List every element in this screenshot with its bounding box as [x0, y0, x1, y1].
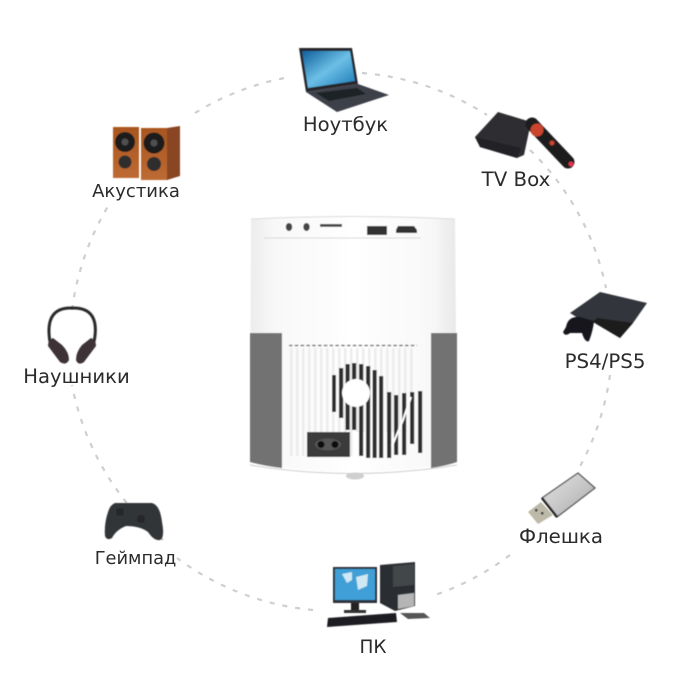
- right grey speaker panel: [431, 333, 457, 468]
- label: TV Box: TV Box: [481, 168, 551, 191]
- label: PC: ПК: [359, 637, 387, 658]
- label: flash drive: Флешка: [519, 525, 603, 548]
- device: speakers: [113, 126, 180, 180]
- device: desktop PC: [327, 562, 430, 627]
- dashed connection ring: [72, 73, 610, 610]
- label: speakers: Акустика: [92, 181, 180, 202]
- projector rear view: [250, 216, 457, 480]
- left grey speaker panel: [250, 333, 282, 468]
- device: gamepad: [105, 503, 163, 540]
- device: USB flash drive: [528, 473, 595, 524]
- top edge: [251, 216, 455, 219]
- bottom edge: [250, 465, 457, 474]
- power socket: [307, 432, 350, 457]
- projector body: [250, 216, 457, 472]
- vent light slats: [290, 348, 412, 456]
- port divider: [264, 238, 421, 239]
- label: headphones: Наушники: [23, 365, 130, 388]
- audio jack 1: [286, 223, 292, 231]
- vent top dashes: [289, 344, 417, 346]
- fan hub highlight: [342, 379, 370, 407]
- label: gamepad: Геймпад: [95, 548, 176, 569]
- fan highlight streak: [392, 397, 411, 446]
- HDMI port: [396, 226, 417, 233]
- audio jack 2: [303, 223, 310, 231]
- device: game console: [563, 292, 647, 341]
- USB port: [367, 226, 387, 235]
- device: headphones: [48, 308, 96, 364]
- label: PS4/PS5: PS4/PS5: [565, 350, 645, 373]
- fan seen through vent: [332, 363, 422, 458]
- device: laptop: [299, 48, 389, 112]
- SD card slot: [320, 224, 342, 227]
- projector foot: [346, 472, 364, 480]
- label: laptop: Ноутбук: [303, 113, 388, 136]
- device: TV box with remote: [475, 112, 574, 166]
